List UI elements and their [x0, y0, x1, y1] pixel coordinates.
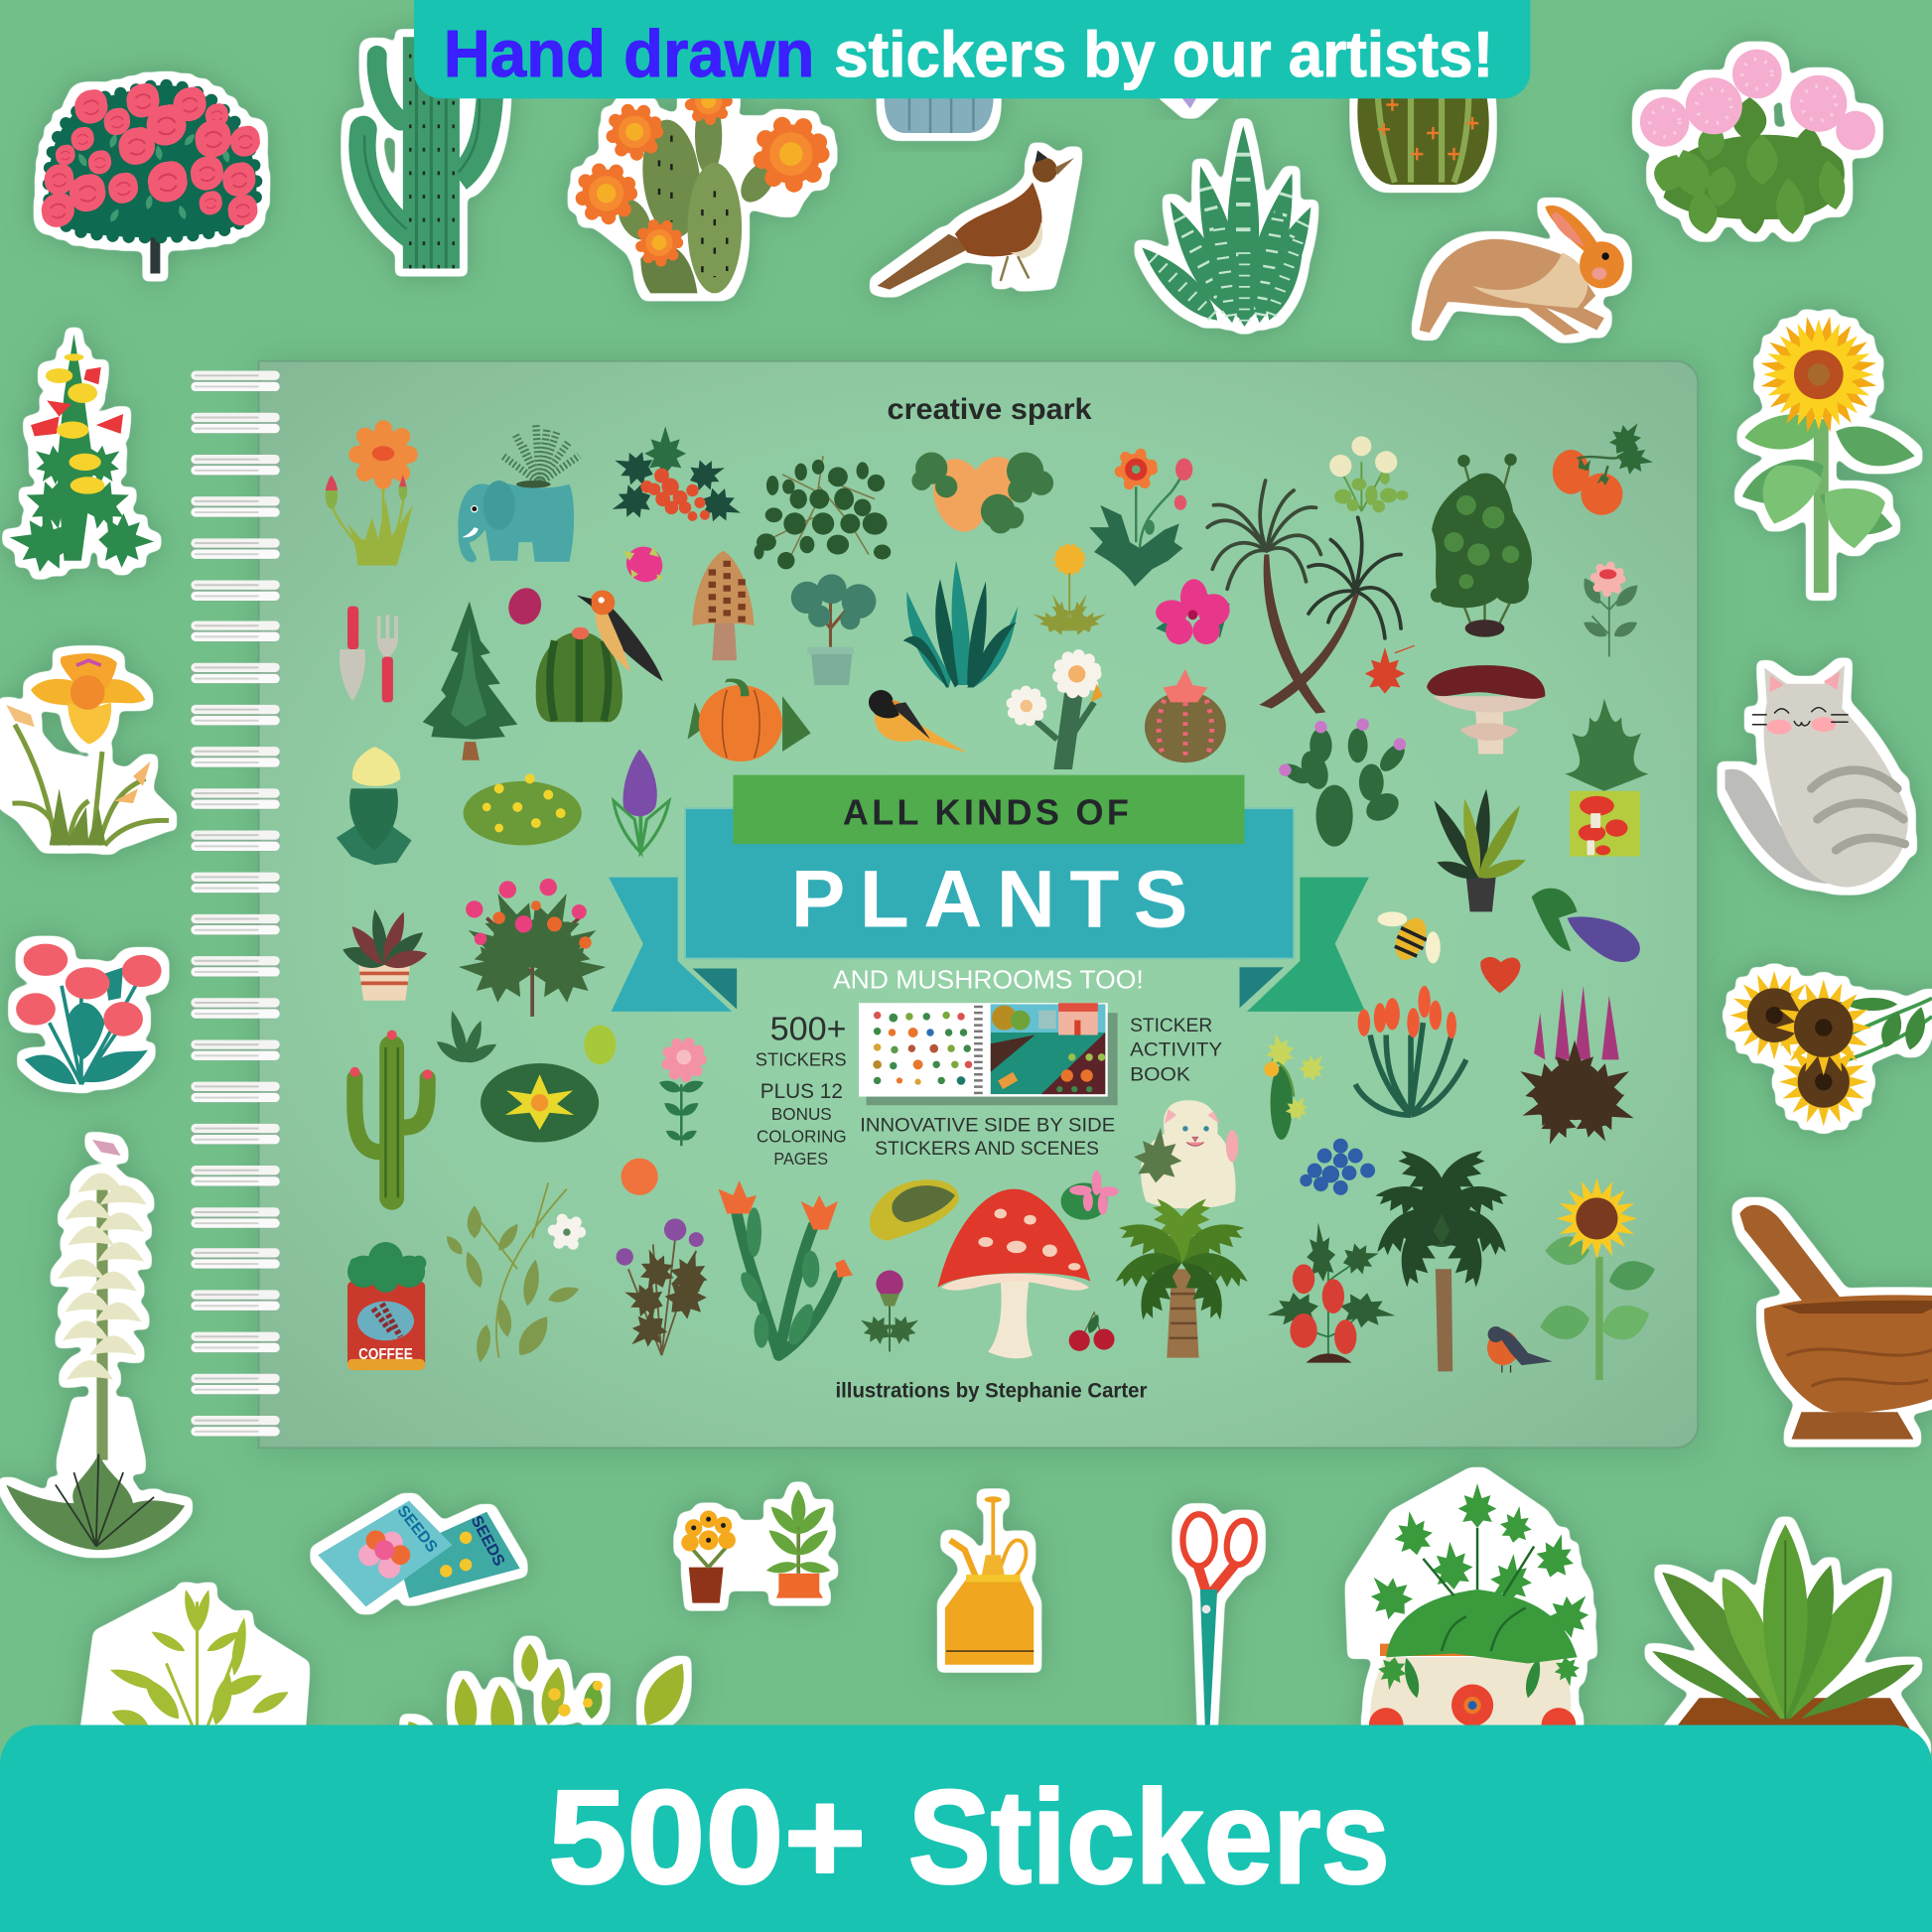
plant: poppy with jagged leaves [1089, 454, 1192, 587]
plant: agave [903, 561, 1018, 688]
plant: dandelion [1029, 546, 1110, 639]
plant: vine with white flower [443, 1182, 581, 1363]
plant: pink flower with leaf [1061, 1171, 1119, 1220]
book features text: PLUS 12 [760, 1080, 843, 1103]
scene page [991, 1003, 1105, 1094]
plant: pink shrub [453, 879, 613, 1017]
sticker: yucca [6, 1140, 185, 1550]
subtitle: AND MUSHROOMS TOO! [833, 964, 1144, 994]
plant: pumpkin [688, 679, 811, 761]
ribbon left tail [609, 878, 732, 1012]
ALL KINDS OF: ALL KINDS OF [843, 791, 1129, 832]
plant: croton pot [1428, 788, 1528, 911]
kitten figurine [1132, 1100, 1238, 1208]
plant: tomatoes [1553, 414, 1656, 515]
plant: tall leafy bush [1431, 454, 1532, 637]
plant: orange flower with grass [326, 429, 413, 566]
book features text: STICKERS [756, 1049, 847, 1070]
plant: water lily pad [481, 1063, 599, 1142]
plant: sunflower [1537, 1177, 1659, 1380]
bottom banner [0, 1725, 1932, 1932]
sticker: parsley in painted pot [1353, 1475, 1601, 1749]
plant: pine tree [423, 602, 517, 760]
mushroom: brown cap [1427, 665, 1545, 755]
sticker: olive leaf plant [401, 1643, 696, 1754]
plant: clover [1329, 436, 1409, 512]
plant: peony [1579, 566, 1642, 656]
plant: astilbe [1507, 986, 1643, 1151]
book features text: BOOK [1130, 1063, 1191, 1085]
sticker: wooden mortar and pestle [1739, 1205, 1932, 1440]
plant: hyacinth [614, 750, 669, 853]
sticker: brass oil can [945, 1496, 1034, 1665]
sticker: scissors [1182, 1514, 1258, 1725]
plant: round pink cactus [1145, 669, 1226, 762]
tools: trowel and fork [340, 607, 398, 702]
plant: plum [503, 584, 546, 629]
plant: elephant planter [458, 425, 579, 562]
sticker: light green bamboo [86, 1588, 302, 1749]
sticker: orange lily [6, 653, 169, 845]
sticker: barrel cactus [1357, 86, 1489, 185]
sticker: cat [1725, 665, 1908, 888]
publisher name: creative spark [888, 393, 1092, 426]
headline number: 500+ [548, 1763, 866, 1911]
sticker: sunflower [1742, 305, 1915, 593]
book cover [259, 361, 1698, 1448]
sticker: zebra aloe [1133, 126, 1324, 330]
plant: eggplant [1532, 889, 1640, 962]
plant: melons and leaves [911, 450, 1053, 537]
mushroom: red fly agaric [937, 1189, 1090, 1358]
plant: moss [870, 1179, 959, 1241]
sticker: rose bush [42, 83, 260, 274]
plant: bird of paradise cactus [719, 1180, 853, 1355]
headline word: Stickers [908, 1763, 1390, 1911]
plant: heart leaf [1480, 957, 1520, 993]
sticker: sunflower bunch [1729, 971, 1932, 1126]
PLANTS: PLANTS [791, 854, 1187, 944]
book features text: PAGES [773, 1149, 828, 1169]
sticker: rabbit [1420, 206, 1624, 336]
plant: pink plumeria [1156, 579, 1230, 644]
plant: small dark seedling [433, 1009, 499, 1067]
plant: red maple leaf [1365, 645, 1415, 694]
sticker: coral roses [16, 944, 162, 1084]
bird: robin [1487, 1326, 1553, 1373]
mushroom: morel [692, 551, 755, 660]
book coil [975, 1006, 982, 1094]
coffee label: COFFEE [358, 1345, 413, 1363]
fruit: orange [621, 1159, 658, 1195]
book features text: 500+ [770, 1011, 847, 1047]
plant: coffee can [347, 1242, 426, 1370]
plant: red berries [607, 426, 747, 529]
fruit: cherries [1069, 1312, 1115, 1351]
plant: pink rose [657, 1042, 705, 1146]
sticker: potted flowers [681, 1489, 832, 1603]
fruit: lime [584, 1026, 617, 1064]
sticker page [873, 1012, 972, 1085]
book features text: STICKERS AND SCENES [875, 1138, 1099, 1160]
plant: yellow shrub [464, 773, 582, 845]
bird: oriole [869, 690, 967, 753]
sticker: prickly pear with orange flowers [582, 82, 821, 293]
banner text white: stickers by our artists! [834, 19, 1493, 90]
fruit: blueberries [1300, 1139, 1375, 1195]
plant: saguaro [349, 1031, 433, 1197]
plant: oxalis [755, 456, 891, 569]
sticker: saguaro [362, 37, 490, 269]
open sticker book image [859, 1003, 1118, 1105]
book features text: BONUS [771, 1104, 832, 1124]
seeds label front: SEEDS [393, 1502, 441, 1556]
plant: protea [337, 747, 412, 865]
book features text: ACTIVITY [1130, 1039, 1222, 1061]
top banner [414, 0, 1530, 98]
plant: short palm [1110, 1192, 1253, 1358]
plant: small potted tree [791, 574, 876, 685]
book features text: INNOVATIVE SIDE BY SIDE [860, 1114, 1115, 1136]
sticker: spinach in planter [1652, 1524, 1923, 1749]
plant: rosemary can [1565, 699, 1649, 857]
sticker: blue cactus [885, 86, 994, 133]
bird: woodpecker [577, 590, 663, 681]
plant: red hot poker [1355, 986, 1466, 1115]
book features text: STICKER [1130, 1015, 1212, 1036]
plant: dragon fruit [620, 540, 669, 589]
insect: bee [1378, 911, 1441, 965]
illustrator credit: illustrations by Stephanie Carter [835, 1379, 1147, 1402]
sticker: roadrunner [878, 150, 1074, 290]
banner text blue: Hand drawn [444, 17, 814, 91]
spiral binding [191, 371, 280, 1437]
plant: small purple thistle [854, 1271, 925, 1351]
plant: tall palm [1368, 1142, 1515, 1371]
plant: barrel cactus [536, 627, 622, 722]
sticker: seed packets [318, 1501, 520, 1606]
plant: thistle [617, 1218, 720, 1358]
plant: white flowered cactus [1012, 655, 1103, 766]
title ribbon [609, 775, 1369, 1012]
plant: cucumber [1261, 1030, 1332, 1140]
seeds label back: SEEDS [468, 1513, 508, 1570]
plant: crossed palms [1207, 481, 1401, 714]
book shadow [252, 357, 1707, 1456]
sticker: pink hydrangea [1640, 50, 1875, 236]
plant: prickly pear with purple flowers [1279, 719, 1409, 847]
plant: strawberries [1265, 1221, 1398, 1363]
sticker: small purple tip [1165, 88, 1213, 111]
book features text [756, 1011, 1222, 1169]
plant: potted red leaf [340, 908, 429, 1001]
sticker: hollyhock [5, 334, 155, 577]
book features text: COLORING [757, 1126, 847, 1146]
